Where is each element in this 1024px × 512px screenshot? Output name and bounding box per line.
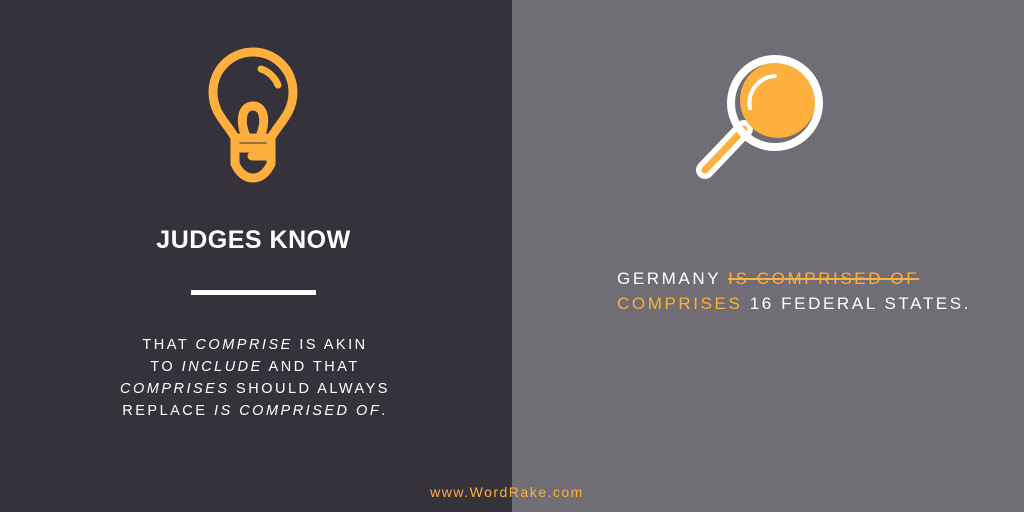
icon: magnifying glass — [696, 55, 823, 179]
example sentence: GERMANY IS COMPRISED OF — [617, 269, 919, 288]
text block: THAT COMPRISE IS AKIN — [142, 337, 368, 353]
panel: left — [0, 0, 512, 512]
text block: TO INCLUDE AND THAT — [150, 359, 360, 375]
heading: judges know: JUDGES KNOW — [156, 226, 351, 254]
panel: right — [512, 0, 1024, 512]
divider bar — [191, 290, 316, 295]
footer url: www.WordRake.com — [430, 484, 584, 500]
example sentence: COMPRISES 16 FEDERAL STATES. — [617, 294, 971, 313]
text block — [120, 337, 390, 419]
example sentence — [617, 269, 971, 313]
icon: light bulb — [208, 48, 298, 182]
text block: REPLACE IS COMPRISED OF. — [122, 403, 388, 419]
text block: COMPRISES SHOULD ALWAYS — [120, 381, 390, 397]
